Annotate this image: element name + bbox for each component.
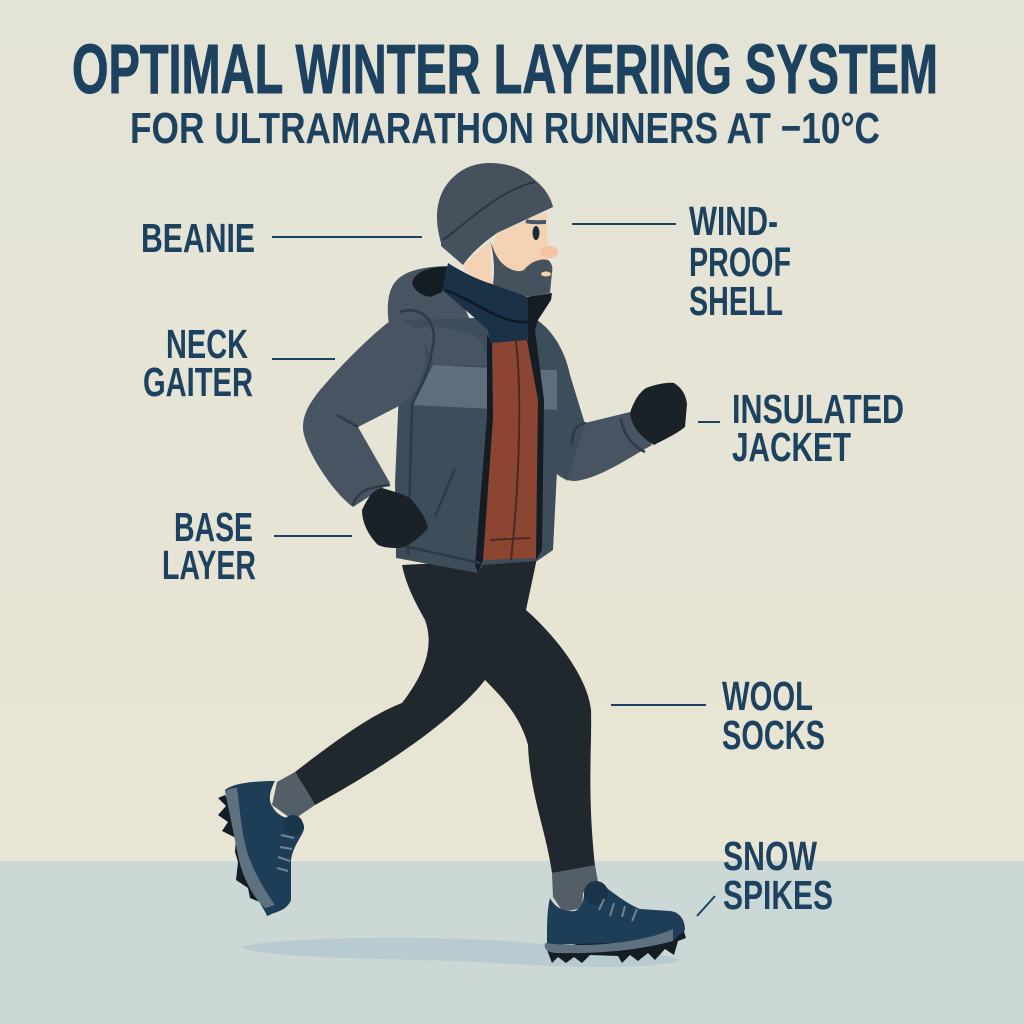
hood (388, 266, 470, 330)
label: snow spikes (697, 833, 833, 918)
beard (490, 240, 552, 297)
front shoe spikes (547, 925, 686, 963)
beanie text: BEANIE (141, 215, 255, 261)
windproof leader line (572, 223, 676, 225)
label: neck gaiter (143, 321, 335, 405)
gaiter text: GAITER (143, 359, 253, 405)
base layer (483, 340, 538, 560)
beanie leader line (272, 236, 422, 238)
label: insulated jacket (698, 386, 904, 470)
back shoe spikes (218, 795, 285, 916)
eyebrow (526, 221, 546, 222)
proof text: PROOF (689, 239, 791, 285)
jacket zip edges (475, 330, 544, 573)
right arm (553, 412, 652, 481)
neck gaiter (442, 263, 530, 343)
label: windproof shell (572, 198, 791, 324)
jacket body (395, 318, 585, 573)
right glove (630, 383, 687, 445)
ground shadow (240, 938, 680, 967)
front shoe laces (599, 899, 637, 921)
runner figure (218, 163, 687, 963)
label: wool socks (611, 673, 825, 758)
front shoe sole (545, 929, 673, 953)
neck gaiter leader line (272, 358, 335, 360)
jacket stripe left (413, 365, 492, 409)
eye (532, 226, 540, 240)
shell text: SHELL (689, 278, 783, 324)
face (492, 212, 553, 280)
front shoe heel tab (584, 881, 608, 905)
gaiter fold shadow (445, 290, 530, 322)
snow text: SNOW (723, 833, 817, 879)
jacket collar (528, 293, 552, 340)
jacket shoulder panel (398, 327, 492, 365)
nose (540, 246, 558, 258)
wool text: WOOL (722, 673, 813, 719)
left glove (362, 488, 428, 548)
arm and pocket seams (337, 310, 645, 563)
jacket text: JACKET (732, 424, 851, 470)
neck skin (463, 242, 492, 284)
spikes text: SPIKES (723, 872, 833, 918)
layer text: LAYER (162, 542, 256, 588)
base layer seams (490, 335, 530, 560)
front shoe upper (547, 884, 685, 945)
back leg and hips (295, 558, 595, 873)
insulated text: INSULATED (732, 386, 904, 432)
insulated jacket leader line (698, 421, 720, 423)
left arm (303, 320, 425, 507)
socks text: SOCKS (722, 712, 825, 758)
back shoe sole (225, 788, 275, 908)
snow spikes leader line (697, 896, 715, 916)
base layer leader line (274, 535, 352, 537)
label: base layer (162, 504, 352, 588)
front shoe (545, 881, 686, 963)
back shoe upper (225, 781, 304, 915)
back shoe (218, 781, 304, 916)
back sock (272, 772, 315, 820)
jacket stripe right (540, 370, 557, 410)
back shoe laces (277, 835, 294, 871)
beanie fold line (443, 182, 535, 240)
back shoe heel tab (283, 815, 303, 835)
hood lining (412, 267, 447, 297)
wool socks leader line (611, 704, 706, 706)
snowy ground (0, 861, 1024, 1024)
beanie (437, 163, 553, 265)
windproof text: WIND- (689, 198, 778, 244)
mouth (541, 272, 551, 276)
base text: BASE (174, 504, 253, 550)
front sock (552, 865, 598, 912)
neck text: NECK (166, 321, 248, 367)
